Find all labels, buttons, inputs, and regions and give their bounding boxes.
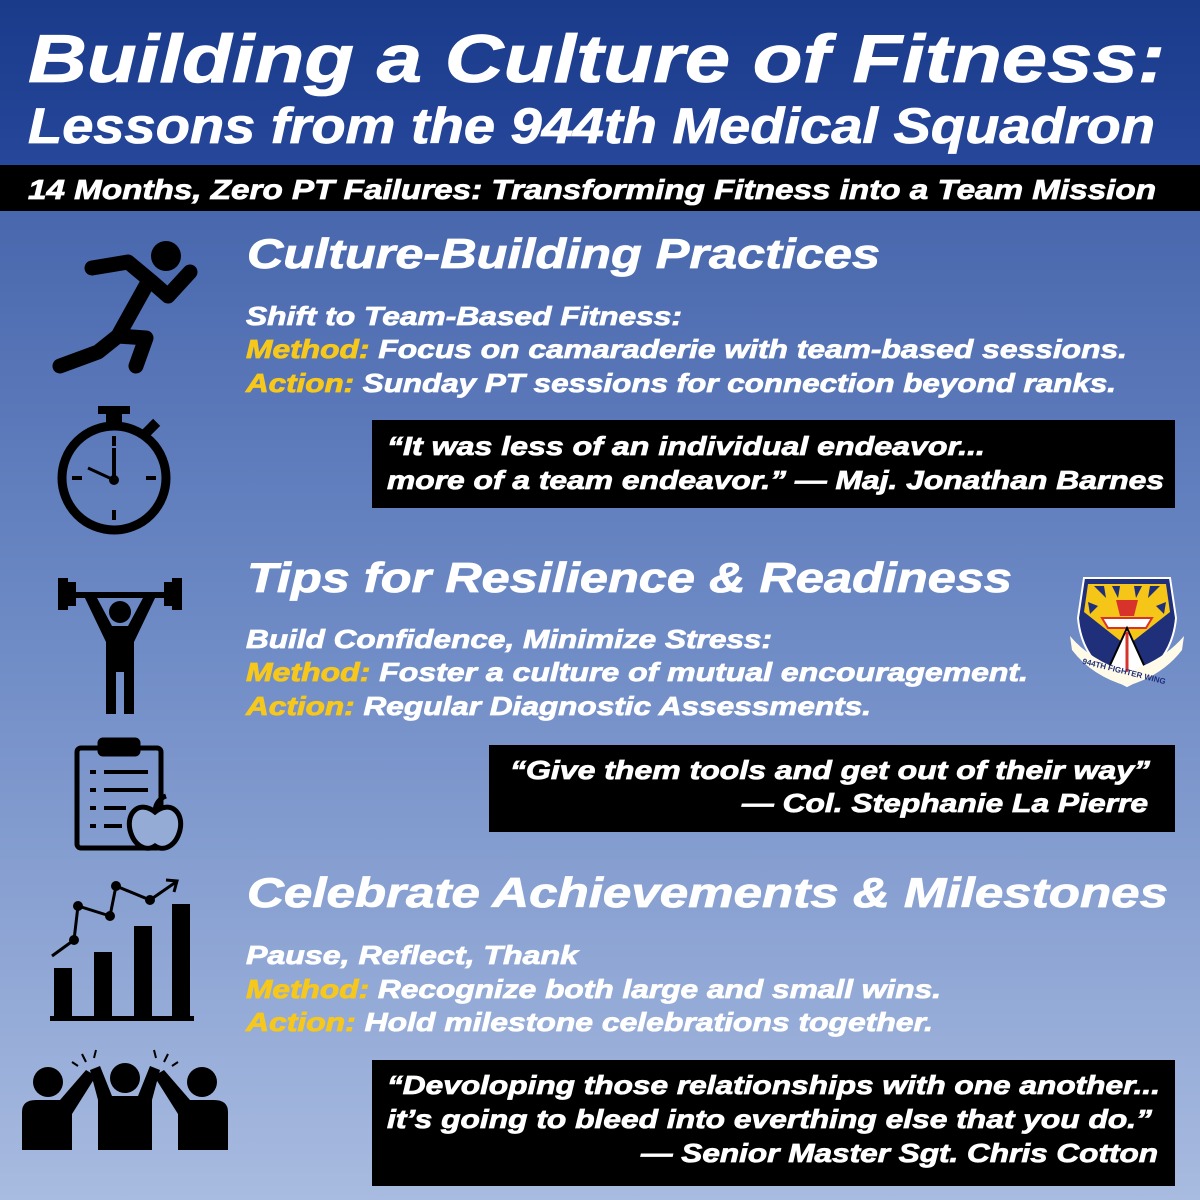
- callout: quote 1: “It was less of an individual endeavor...: [387, 431, 985, 461]
- text block 1: Shift to Team-Based Fitness:: [246, 301, 682, 331]
- text block 3: [245, 940, 941, 1037]
- title: [28, 21, 1165, 154]
- icon: growth chart: [50, 880, 194, 1021]
- icon: 944th Fighter Wing emblem: 944TH FIGHTER WING: [1082, 657, 1167, 686]
- text block 2: Build Confidence, Minimize Stress:: [246, 624, 772, 654]
- text block 2: Action: Regular Diagnostic Assessments.: [245, 691, 871, 721]
- text block 3: Action: Hold milestone celebrations together.: [245, 1007, 933, 1037]
- callout: quote 3: it’s going to bleed into everthing else that you do.”: [387, 1104, 1152, 1134]
- subtitle band: [0, 165, 1200, 211]
- icon: weightlifter: [58, 578, 182, 714]
- text block 1: Method: Focus on camaraderie with team-based sessions.: [246, 334, 1127, 364]
- callout: quote 3: [372, 1060, 1175, 1186]
- text block 2: [245, 624, 1028, 721]
- title: Lessons from the 944th Medical Squadron: [28, 98, 1155, 154]
- header band: [0, 0, 1200, 165]
- callout: quote 1: [372, 420, 1175, 508]
- section 1: culture-building: [245, 230, 1127, 398]
- callout: quote 1: more of a team endeavor.” — Maj. Jonathan Barnes: [387, 465, 1164, 495]
- text block 1: [245, 301, 1127, 398]
- icon: clipboard with apple: [77, 740, 181, 848]
- text block 3: Method: Recognize both large and small wins.: [246, 974, 941, 1004]
- subtitle band: 14 Months, Zero PT Failures: Transforming Fitness into a Team Mission: [28, 174, 1156, 205]
- section 2: resilience: [245, 554, 1028, 721]
- callout: quote 2: “Give them tools and get out of their way”: [510, 755, 1150, 785]
- icon: runner: [60, 241, 190, 366]
- callout: quote 3: “Devoloping those relationships with one another...: [387, 1070, 1160, 1100]
- heading 1: Culture-Building Practices: [247, 230, 880, 277]
- callout: quote 3: — Senior Master Sgt. Chris Cotton: [640, 1138, 1158, 1168]
- icon: team high-five: [22, 1050, 228, 1150]
- heading 2: Tips for Resilience & Readiness: [247, 554, 1012, 601]
- callout: quote 2: [489, 745, 1175, 832]
- icon: stopwatch: [62, 406, 166, 530]
- heading 3: Celebrate Achievements & Milestones: [247, 869, 1168, 916]
- title: Building a Culture of Fitness:: [28, 21, 1165, 97]
- callout: quote 2: — Col. Stephanie La Pierre: [741, 788, 1148, 818]
- text block 2: Method: Foster a culture of mutual encouragement.: [246, 657, 1028, 687]
- icon: 944th Fighter Wing emblem: [1070, 578, 1184, 686]
- section 3: celebrate: [245, 869, 1168, 1037]
- text block 1: Action: Sunday PT sessions for connection beyond ranks.: [245, 368, 1116, 398]
- text block 3: Pause, Reflect, Thank: [246, 940, 580, 970]
